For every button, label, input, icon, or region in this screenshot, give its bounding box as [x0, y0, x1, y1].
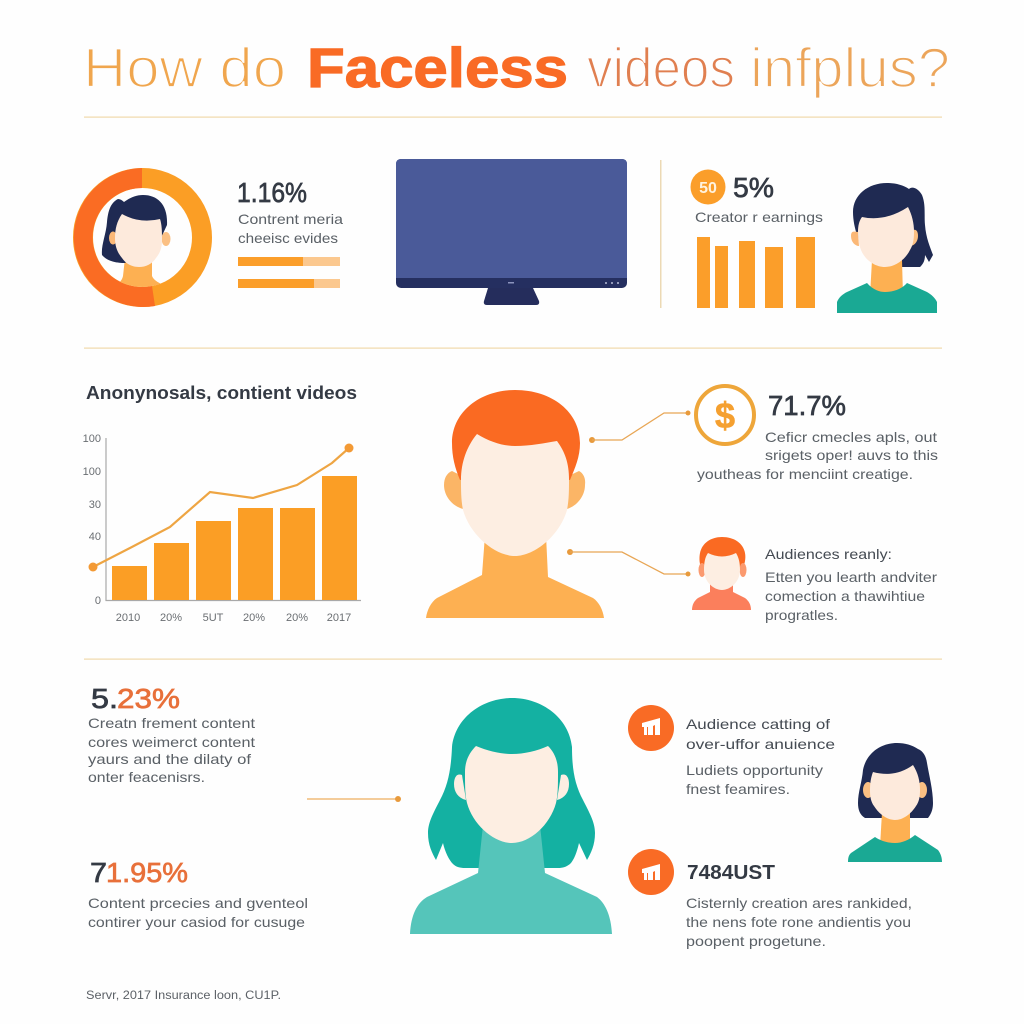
text block: 5.23% description: yaurs and the dilaty of — [88, 751, 251, 767]
panel: donut stat — [74, 168, 343, 307]
x axis labels: 20% — [243, 612, 265, 624]
text block: 7484UST description — [686, 895, 912, 949]
y axis labels: 0 — [95, 595, 101, 607]
y axis labels: 30 — [89, 499, 101, 511]
arrow: head to dollar stat — [589, 410, 690, 443]
text block: 71.95% description: contirer your casiod for cusuge — [88, 914, 305, 930]
title: videos — [587, 36, 735, 99]
icon: chart badge one — [628, 705, 674, 751]
avatar: large orange-haired head — [426, 390, 604, 618]
stat: 5%: 5% — [733, 172, 774, 203]
chart heading: Anonynosals, contient videos — [86, 382, 357, 403]
icon: dollar coin — [696, 386, 754, 444]
text block: audience catting — [686, 716, 835, 797]
title: infplus? — [750, 36, 950, 99]
text block: 5.23% description: cores weimerct content — [88, 734, 255, 750]
text block: audience catting: Audience catting of — [686, 716, 830, 732]
source note: Servr, 2017 Insurance loon, CU1P. — [86, 990, 281, 1002]
text block: 5.23% description — [88, 715, 255, 785]
label: creator earnings: Creator r earnings — [695, 209, 823, 225]
text block: audience catting: fnest feamires. — [686, 781, 790, 797]
y axis labels: 100 — [83, 433, 101, 445]
x axis labels — [116, 612, 351, 624]
text block: 71.95% description: Content prcecies and gventeol — [88, 895, 308, 911]
stat: 71.7%: 71.7% — [768, 390, 846, 421]
text block: 5.23% description: onter feacenisrs. — [88, 769, 205, 785]
icon: chart badge two — [628, 849, 674, 895]
stat: 5.23%: 23% — [117, 683, 180, 714]
text block: 71.7% description — [697, 429, 938, 482]
text block: 7484UST description: Cisternly creation ares rankided, — [686, 895, 912, 911]
x axis labels: 2017 — [327, 612, 351, 624]
icon: monitor — [396, 159, 627, 305]
progress bars — [238, 257, 340, 288]
text block: audiences: progratles. — [765, 607, 838, 623]
badge: 50: 50 — [699, 180, 717, 197]
text block: 71.95% description — [88, 895, 308, 930]
panel: creator earnings — [690, 170, 823, 308]
text block: 71.7% description: Ceficr cmecles apls, out — [765, 429, 937, 445]
stat description — [238, 211, 343, 246]
text block: 5.23% description: Creatn frement content — [88, 715, 255, 731]
stat: 7484UST: 7484UST — [687, 862, 775, 884]
avatar: woman lower right — [848, 743, 942, 862]
text block: audiences: Etten you learth andviter — [765, 569, 937, 585]
avatar: large teal-haired head — [410, 698, 612, 934]
x axis labels: 2010 — [116, 612, 140, 624]
text block: 71.7% description: srigets oper! auvs to this — [765, 447, 938, 463]
infographic canvas — [73, 46, 947, 1000]
x axis labels: 20% — [160, 612, 182, 624]
text block: audiences — [765, 546, 937, 623]
stat: 71.95%: 7 — [90, 857, 107, 888]
donut ring with avatar — [74, 168, 202, 307]
text block: 71.7% description: youtheas for menciint creatige. — [697, 466, 913, 482]
avatar: small orange-haired person — [692, 537, 751, 610]
bar chart: earnings — [697, 237, 815, 308]
arrow: stat to teal head — [307, 796, 401, 802]
arrow: head to audience stat — [567, 549, 690, 576]
title: Faceless — [307, 36, 568, 99]
trend line — [88, 444, 354, 572]
stat description: cheeisc evides — [238, 230, 338, 246]
x axis labels: 5UT — [203, 612, 224, 624]
text block: 7484UST description: poopent progetune. — [686, 933, 826, 949]
y axis labels: 40 — [89, 531, 101, 543]
stat: 71.95%: 1.95% — [106, 857, 188, 888]
text block: audiences: comection a thawihtiue — [765, 588, 925, 604]
bars — [112, 476, 357, 600]
title — [83, 36, 950, 99]
y axis labels: 100 — [83, 466, 101, 478]
text block: audience catting: over-uffor anuience — [686, 736, 835, 752]
icon: dollar coin: $ — [715, 395, 735, 436]
panel: line and bar chart — [83, 382, 361, 624]
title: How do — [83, 36, 286, 99]
stat: 5.23%: 5. — [91, 683, 118, 714]
x axis labels: 20% — [286, 612, 308, 624]
text block: audiences: Audiences reanly: — [765, 546, 892, 562]
avatar: woman in teal top right — [837, 183, 937, 313]
stat description: Contrent meria — [238, 211, 343, 227]
text block: audience catting: Ludiets opportunity — [686, 762, 823, 778]
text block: 7484UST description: the nens fote rone andientis you — [686, 914, 911, 930]
stat: 5.23% — [91, 683, 180, 714]
chart axes — [106, 438, 361, 600]
stat: 1.16%: 1.16% — [237, 177, 307, 208]
y axis labels — [83, 433, 101, 607]
